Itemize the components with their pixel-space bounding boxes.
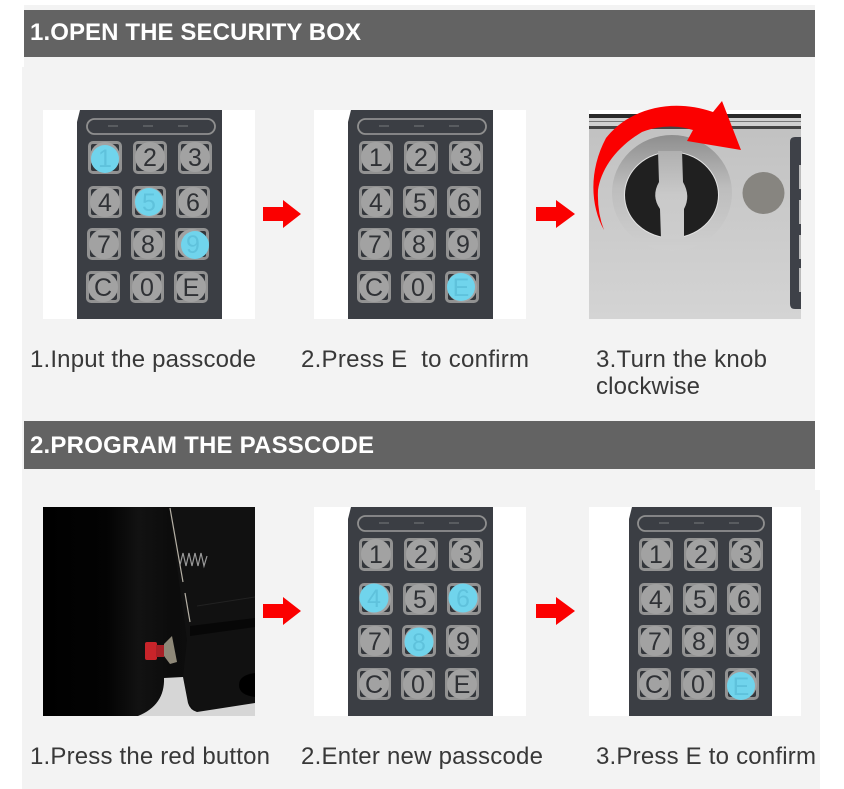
panel: enter new passcode keypad with 4 6 8 highlighted [314, 507, 526, 716]
panel: confirm keypad with E highlighted: 6 [737, 586, 751, 614]
panel: step 2 keypad photo with E highlighted: 7 [368, 231, 382, 259]
panel: step 1 keypad photo with 1 5 9 highlighted: 5 [142, 189, 156, 217]
panel: step 2 keypad photo with E highlighted: C [365, 274, 383, 302]
caption: clockwise [596, 373, 700, 400]
arrow [536, 597, 575, 625]
panel: enter new passcode keypad with 4 6 8 highlighted: C [365, 671, 383, 699]
panel: confirm keypad with E highlighted: 2 [694, 541, 708, 569]
panel: enter new passcode keypad with 4 6 8 highlighted: 4 [367, 585, 381, 613]
panel: confirm keypad with E highlighted: 0 [691, 671, 705, 699]
icon: red button [145, 636, 177, 664]
panel: step 1 keypad photo with 1 5 9 highlighted: 9 [186, 231, 200, 259]
panel: confirm keypad with E highlighted: 5 [693, 586, 707, 614]
panel: step 1 keypad photo with 1 5 9 highlighted: 2 [143, 144, 157, 172]
panel: step 2 keypad photo with E highlighted: 1 [369, 144, 383, 172]
caption [596, 346, 767, 400]
panel: enter new passcode keypad with 4 6 8 highlighted: 1 [369, 541, 383, 569]
caption: 2.Press E to confirm [301, 346, 529, 373]
panel: step 1 keypad photo with 1 5 9 highlighted: 7 [97, 231, 111, 259]
panel: step 1 keypad photo with 1 5 9 highlighted: 6 [186, 189, 200, 217]
panel: step 2 keypad photo with E highlighted: E [453, 274, 469, 302]
heading: open the security box: 1.OPEN THE SECURITY BOX [30, 19, 361, 46]
panel: confirm keypad with E highlighted: C [645, 671, 663, 699]
panel: confirm keypad with E highlighted: 1 [649, 541, 663, 569]
panel: enter new passcode keypad with 4 6 8 highlighted: 7 [368, 628, 382, 656]
arrow: clockwise curved arrow [593, 101, 741, 230]
arrow [263, 200, 301, 228]
icon: knob dial [612, 135, 732, 251]
panel: confirm keypad with E highlighted: 4 [649, 586, 663, 614]
icon: round button [742, 172, 784, 214]
caption: 3.Press E to confirm [596, 743, 816, 770]
panel: step 1 keypad photo with 1 5 9 highlighted: 1 [98, 145, 112, 173]
panel: enter new passcode keypad with 4 6 8 highlighted: 2 [414, 541, 428, 569]
panel: step 2 keypad photo with E highlighted: 9 [456, 231, 470, 259]
panel: enter new passcode keypad with 4 6 8 highlighted: 0 [411, 671, 425, 699]
panel: step 2 keypad photo with E highlighted: 5 [413, 189, 427, 217]
panel: step 1 keypad photo with 1 5 9 highlighted: 8 [141, 231, 155, 259]
panel: step 3 knob photo with curved red arrow [589, 101, 801, 319]
panel: enter new passcode keypad with 4 6 8 highlighted: 5 [413, 586, 427, 614]
panel: enter new passcode keypad with 4 6 8 highlighted: 6 [456, 585, 470, 613]
panel: step 1 keypad photo with 1 5 9 highlighted: E [183, 274, 199, 302]
panel: confirm keypad with E highlighted: 9 [736, 628, 750, 656]
panel: step 2 keypad photo with E highlighted [314, 110, 526, 319]
panel: confirm keypad with E highlighted [589, 507, 801, 716]
arrow [263, 597, 301, 625]
caption: 2.Enter new passcode [301, 743, 543, 770]
panel: enter new passcode keypad with 4 6 8 highlighted: 8 [412, 629, 426, 657]
panel: red button photo [43, 507, 255, 716]
panel: step 2 keypad photo with E highlighted: 0 [411, 274, 425, 302]
panel: step 2 keypad photo with E highlighted: 4 [369, 189, 383, 217]
panel: step 1 keypad photo with 1 5 9 highlighted: 3 [188, 144, 202, 172]
panel: confirm keypad with E highlighted: 8 [692, 628, 706, 656]
panel: enter new passcode keypad with 4 6 8 highlighted: E [454, 671, 470, 699]
heading: program the passcode: 2.PROGRAM THE PASSCODE [30, 432, 374, 459]
arrow [536, 200, 575, 228]
panel: enter new passcode keypad with 4 6 8 highlighted: 9 [456, 628, 470, 656]
panel: step 2 keypad photo with E highlighted: 8 [412, 231, 426, 259]
panel: enter new passcode keypad with 4 6 8 highlighted: 3 [459, 541, 473, 569]
panel: step 2 keypad photo with E highlighted: 6 [457, 189, 471, 217]
side keypad edge [790, 137, 801, 309]
panel: step 2 keypad photo with E highlighted: 3 [459, 144, 473, 172]
heading: program the passcode [24, 421, 815, 469]
panel: confirm keypad with E highlighted: 3 [739, 541, 753, 569]
panel: confirm keypad with E highlighted: 7 [648, 628, 662, 656]
panel: step 1 keypad photo with 1 5 9 highlighted: 4 [98, 189, 112, 217]
panel: step 1 keypad photo with 1 5 9 highlighted: C [94, 274, 112, 302]
panel: step 1 keypad photo with 1 5 9 highlighted [43, 110, 255, 319]
panel: step 1 keypad photo with 1 5 9 highlighted: 0 [140, 274, 154, 302]
heading: open the security box [24, 10, 815, 57]
panel: step 2 keypad photo with E highlighted: 2 [414, 144, 428, 172]
caption: 3.Turn the knob [596, 346, 767, 373]
caption: 1.Input the passcode [30, 346, 256, 373]
caption: 1.Press the red button [30, 743, 270, 770]
panel: confirm keypad with E highlighted: E [733, 673, 749, 701]
